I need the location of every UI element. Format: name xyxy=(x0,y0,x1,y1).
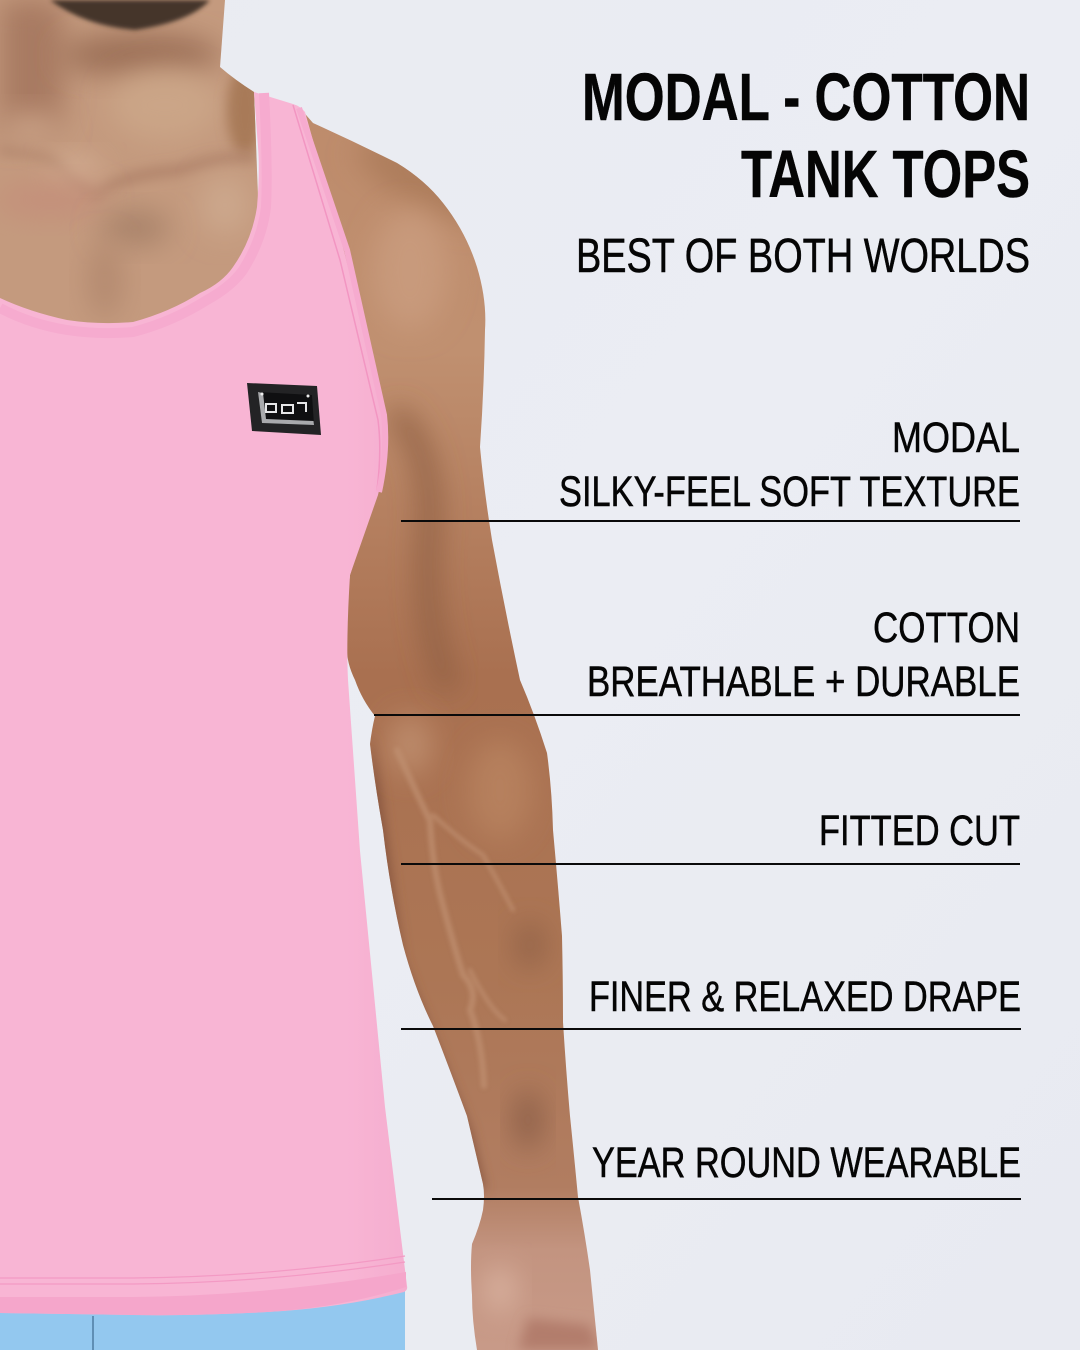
title xyxy=(582,60,1030,212)
feature: cotton: COTTON xyxy=(873,604,1020,652)
beard xyxy=(50,0,210,30)
feature: cotton xyxy=(374,604,1020,716)
tank top xyxy=(0,92,407,1315)
arm xyxy=(290,100,610,1350)
strap seam and armhole hem xyxy=(293,105,380,490)
armhole band xyxy=(299,108,385,492)
neckline hem xyxy=(0,93,267,333)
neck and chest xyxy=(0,0,258,324)
forearm veins xyxy=(397,750,513,1086)
feature: modal xyxy=(401,414,1020,522)
feature: fitted cut: FITTED CUT xyxy=(819,807,1020,855)
feature: modal: MODAL xyxy=(892,414,1020,462)
figure: man wearing pink tank top xyxy=(0,0,610,1350)
logo badge xyxy=(247,383,321,435)
blue shorts xyxy=(0,1288,405,1350)
bottom hem xyxy=(0,1272,406,1315)
hem stitching xyxy=(0,1256,405,1284)
